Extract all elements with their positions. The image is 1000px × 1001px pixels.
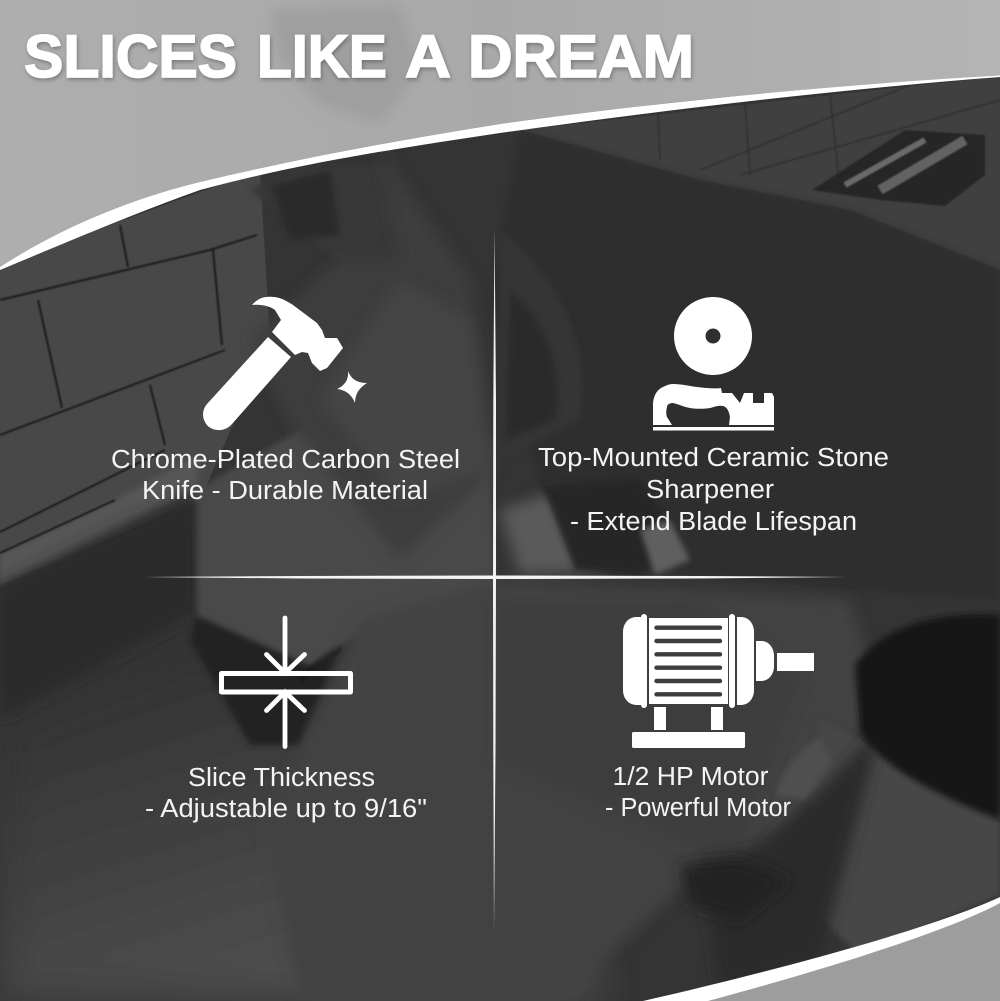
lower right panel xyxy=(680,720,1000,990)
main slicer housing xyxy=(490,130,1000,600)
white curved swoosh edge xyxy=(0,76,1000,270)
feature: ceramic sharpener: Sharpener xyxy=(646,476,775,504)
feature: chrome-plated knife: Knife - Durable Material xyxy=(142,477,428,505)
title xyxy=(24,23,694,90)
title: SLICES xyxy=(24,23,237,90)
icon: electric motor xyxy=(623,614,814,748)
title: LIKE xyxy=(257,23,387,90)
gloved hand and paper xyxy=(500,480,690,575)
dark sleeve xyxy=(855,614,1000,820)
bottom-right curved corner band xyxy=(643,897,1000,1001)
feature: ceramic sharpener: - Extend Blade Lifespan xyxy=(570,508,857,536)
caption: Top-Mounted Ceramic Stone xyxy=(538,444,889,472)
feature: slice thickness: - Adjustable up to 9/16" xyxy=(145,795,427,823)
caption: 1/2 HP Motor xyxy=(612,763,769,791)
slicer feet and lever xyxy=(190,615,345,745)
dark area under ledge xyxy=(0,490,200,720)
feature: ceramic sharpener xyxy=(538,297,889,536)
lower tray and plastic wrap xyxy=(265,580,880,1001)
icon: thickness gauge xyxy=(222,618,350,746)
title: A xyxy=(405,23,451,90)
floor xyxy=(0,620,600,1001)
feature: chrome-plated knife xyxy=(111,297,460,505)
tiled wall left xyxy=(0,170,270,585)
feature: slice thickness xyxy=(145,618,427,823)
title: DREAM xyxy=(468,23,694,90)
upper right wall and tray xyxy=(520,76,1000,270)
quadrant dividers xyxy=(143,228,846,930)
icon: sharpening stone wheel xyxy=(653,297,774,430)
slicer body xyxy=(197,150,495,665)
caption: Chrome-Plated Carbon Steel xyxy=(111,446,460,474)
top light band xyxy=(0,0,1000,267)
feature: motor: - Powerful Motor xyxy=(605,794,791,822)
feature: motor xyxy=(605,614,814,822)
caption: Slice Thickness xyxy=(188,764,375,792)
icon: hammer with sparkle xyxy=(203,297,367,430)
